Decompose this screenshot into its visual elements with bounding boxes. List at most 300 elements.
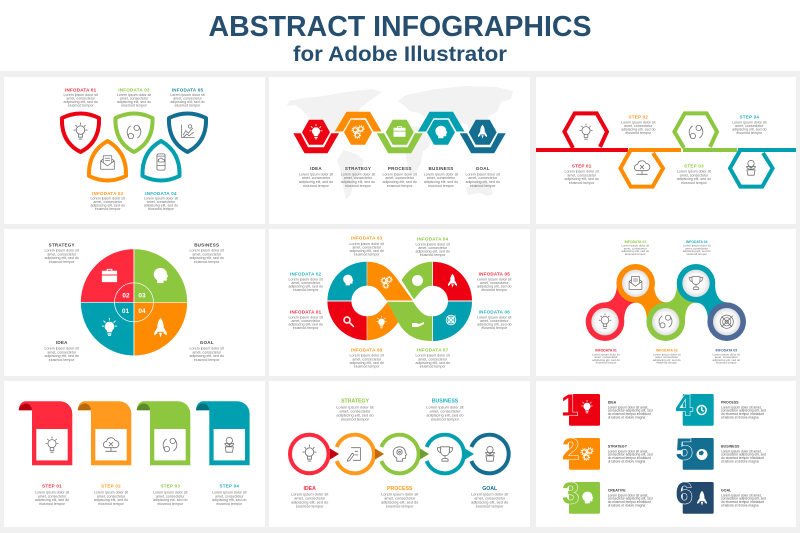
label business: adipiscing elit, sed do	[426, 412, 464, 418]
label infodata 04: amet, consectetur	[685, 246, 708, 250]
label step 01: adipiscing elit, sed do	[565, 177, 599, 181]
quadrant numbers: 04	[138, 308, 146, 315]
label step 04: STEP 04	[739, 114, 759, 119]
block 4 process: 4	[676, 388, 694, 422]
panel: numbered squares	[536, 381, 796, 527]
label step 01: Lorem ipsum dolor sit	[565, 170, 599, 174]
text idea: ut labore et dolore magna	[608, 415, 645, 419]
text goal: do eiusmod tempor incididunt	[721, 500, 764, 504]
label 05: eiusmod tempor	[175, 104, 201, 108]
label goal	[190, 340, 224, 362]
panel: world map hexagons	[269, 77, 530, 224]
label business: adipiscing elit, sed do	[424, 180, 458, 184]
label idea: Lorem ipsum dolor sit	[299, 172, 333, 176]
label infodata 04: adipiscing elit, sed do	[683, 249, 711, 253]
label 02: amet, consectetur	[93, 200, 123, 204]
text business: BUSINESS	[721, 444, 740, 448]
label process: eiusmod tempor	[387, 184, 413, 188]
text idea: do eiusmod tempor incididunt	[608, 412, 651, 416]
label infodata 08: adipiscing elit, sed do	[350, 361, 384, 365]
hexagon step 3	[674, 113, 717, 148]
block 2 strategy	[562, 432, 600, 470]
label step 04: adipiscing elit, sed do	[732, 128, 766, 132]
label process	[381, 486, 419, 508]
label infodata 08	[350, 348, 384, 368]
label 02: adipiscing elit, sed do	[91, 204, 125, 208]
panel: hexagon timeline	[536, 77, 796, 224]
label idea: adipiscing elit, sed do	[45, 354, 79, 358]
label strategy: Lorem ipsum dolor sit	[341, 172, 375, 176]
label infodata 02: adipiscing elit, sed do	[621, 249, 650, 253]
label infodata 06: amet, consectetur	[480, 319, 509, 323]
label step 02	[621, 114, 655, 135]
label step 04: STEP 04	[219, 484, 239, 488]
label process: eiusmod tempor	[386, 504, 414, 508]
label goal: adipiscing elit, sed do	[466, 180, 500, 184]
label infodata 02: Lorem ipsum dolor sit	[289, 278, 323, 282]
label business: amet, consectetur	[430, 408, 461, 414]
label infodata 03: eiusmod tempor	[656, 361, 677, 365]
text process: do eiusmod tempor incididunt	[721, 412, 764, 416]
label infodata 01: Lorem ipsum dolor sit	[592, 352, 620, 356]
text creative: consectetur adipiscing elit, sed	[608, 497, 653, 501]
label infodata 04: INFODATA 04	[686, 240, 708, 244]
label infodata 03: amet, consectetur	[352, 246, 382, 250]
label idea	[45, 340, 79, 362]
panel: five shields	[4, 77, 265, 224]
label step 01: amet, consectetur	[567, 173, 597, 177]
label infodata 05: eiusmod tempor	[716, 361, 737, 365]
label strategy	[341, 166, 375, 188]
label 04: adipiscing elit, sed do	[144, 204, 178, 208]
label 04: eiusmod tempor	[148, 207, 175, 211]
label 03: INFODATA 03	[118, 87, 150, 92]
label infodata 03: adipiscing elit, sed do	[350, 249, 384, 253]
ring strategy	[337, 435, 374, 473]
label 04: Lorem ipsum dolor sit	[144, 197, 178, 201]
label goal	[466, 166, 500, 188]
text strategy: ut labore et dolore magna	[608, 459, 645, 463]
text business: consectetur adipiscing elit, sed	[721, 453, 766, 457]
label business: BUSINESS	[194, 243, 219, 248]
node 03	[646, 302, 685, 341]
label process	[383, 166, 417, 188]
label infodata 04	[683, 240, 711, 256]
ribbon step 04	[196, 401, 250, 465]
label infodata 03: Lorem ipsum dolor sit	[653, 352, 681, 356]
text goal: GOAL	[721, 488, 732, 492]
label strategy: eiusmod tempor	[345, 184, 372, 188]
label step 03: STEP 03	[160, 484, 180, 488]
label step 02: Lorem ipsum dolor sit	[621, 120, 655, 124]
label infodata 06	[477, 309, 511, 330]
label step 04	[732, 114, 766, 135]
label infodata 05: amet, consectetur	[715, 355, 738, 359]
label infodata 01: amet, consectetur	[291, 319, 321, 323]
label 02: Lorem ipsum dolor sit	[91, 197, 125, 201]
panel: ring chain	[269, 381, 530, 527]
label idea: eiusmod tempor	[296, 504, 324, 508]
label 01	[64, 87, 98, 108]
label step 03: adipiscing elit, sed do	[677, 177, 711, 181]
label 04: amet, consectetur	[147, 200, 176, 204]
label step 01: STEP 01	[42, 484, 62, 488]
label infodata 05: Lorem ipsum dolor sit	[477, 278, 511, 282]
label strategy: amet, consectetur	[340, 408, 371, 414]
label infodata 07: amet, consectetur	[418, 357, 448, 361]
quadrant icons	[102, 268, 168, 337]
label infodata 07: adipiscing elit, sed do	[416, 361, 450, 365]
label infodata 06: INFODATA 06	[479, 309, 510, 314]
label infodata 04: adipiscing elit, sed do	[416, 250, 450, 254]
label 05: Lorem ipsum dolor sit	[170, 93, 205, 97]
text idea: IDEA	[608, 400, 617, 404]
label infodata 07: INFODATA 07	[417, 348, 449, 353]
label infodata 04: eiusmod tempor	[420, 253, 446, 257]
label infodata 04: Lorem ipsum dolor sit	[683, 244, 711, 248]
label infodata 02	[621, 240, 650, 256]
text process: PROCESS	[721, 400, 739, 404]
panel: ribbons	[4, 381, 265, 527]
label idea	[291, 486, 329, 508]
quadrant numbers: 03	[138, 293, 146, 300]
label infodata 06: eiusmod tempor	[481, 326, 508, 330]
text strategy	[608, 444, 653, 463]
label goal: eiusmod tempor	[470, 184, 496, 188]
label step 03: amet, consectetur	[680, 173, 709, 177]
label strategy: Lorem ipsum dolor sit	[45, 249, 79, 253]
label goal	[471, 486, 509, 508]
world map	[287, 86, 513, 200]
label step 01	[35, 484, 69, 506]
text goal: ut labore et dolore magna	[721, 503, 759, 507]
label 01: Lorem ipsum dolor sit	[64, 93, 98, 97]
label step 04: adipiscing elit, sed do	[212, 498, 246, 502]
label step 03: Lorem ipsum dolor sit	[153, 490, 187, 494]
shield 04	[142, 141, 180, 180]
hexagon step 1	[564, 113, 607, 148]
label infodata 01: eiusmod tempor	[293, 326, 319, 330]
label 04: INFODATA 04	[145, 191, 177, 196]
label 01: INFODATA 01	[65, 87, 97, 92]
text business: Lorem ipsum dolor sit amet,	[721, 449, 762, 453]
ribbon step 01	[19, 401, 72, 465]
label infodata 08: Lorem ipsum dolor sit	[350, 354, 384, 358]
label 03: Lorem ipsum dolor sit	[117, 93, 151, 97]
label infodata 07: eiusmod tempor	[420, 364, 446, 368]
label goal: GOAL	[200, 340, 214, 345]
label goal: adipiscing elit, sed do	[190, 354, 224, 358]
label infodata 05	[477, 271, 511, 292]
panel: pie quadrants	[4, 229, 265, 376]
label idea: amet, consectetur	[294, 496, 326, 500]
label step 01: adipiscing elit, sed do	[35, 498, 69, 502]
label 05: amet, consectetur	[173, 97, 203, 101]
text idea: Lorem ipsum dolor sit amet,	[608, 405, 648, 409]
label infodata 01: INFODATA 01	[595, 349, 617, 353]
label infodata 04: Lorem ipsum dolor sit	[416, 243, 450, 247]
label infodata 05: amet, consectetur	[480, 281, 509, 285]
label infodata 01	[289, 309, 323, 330]
infinity segments	[327, 262, 472, 341]
label business: eiusmod tempor	[428, 184, 455, 188]
label infodata 03	[653, 349, 681, 365]
label process: adipiscing elit, sed do	[381, 500, 418, 504]
block 5 business: 5	[676, 432, 693, 466]
label goal: GOAL	[476, 166, 490, 171]
text process: Lorem ipsum dolor sit amet,	[721, 405, 762, 409]
label process: PROCESS	[388, 166, 412, 171]
label step 02: STEP 02	[101, 484, 121, 488]
block 3 creative	[562, 476, 600, 514]
subtitle: for Adobe Illustrator	[293, 42, 508, 66]
label step 03: adipiscing elit, sed do	[153, 498, 187, 502]
label infodata 03: eiusmod tempor	[354, 252, 380, 256]
label business: BUSINESS	[428, 166, 454, 171]
text strategy: Lorem ipsum dolor sit amet,	[608, 449, 648, 453]
timeline line	[536, 148, 796, 152]
panel: infinity loop	[269, 229, 530, 376]
label step 04: amet, consectetur	[735, 124, 764, 128]
label 05: INFODATA 05	[172, 87, 203, 92]
pie chart	[80, 249, 188, 356]
block 2 strategy: 2	[562, 432, 579, 466]
label strategy: adipiscing elit, sed do	[45, 256, 79, 260]
label step 01: Lorem ipsum dolor sit	[35, 490, 69, 494]
label infodata 01: adipiscing elit, sed do	[289, 322, 323, 326]
shield 01	[62, 114, 99, 152]
arrow 1	[330, 448, 339, 460]
label step 01: STEP 01	[572, 163, 592, 168]
step 1 chevron and hexagon	[293, 120, 339, 153]
ribbon step 02	[78, 401, 131, 465]
label step 03: eiusmod tempor	[681, 181, 708, 185]
label infodata 06: Lorem ipsum dolor sit	[477, 315, 511, 319]
quadrant numbers: 01	[122, 308, 129, 315]
block 5 business	[676, 432, 714, 470]
label idea: adipiscing elit, sed do	[291, 500, 328, 504]
label infodata 01: INFODATA 01	[290, 309, 322, 314]
label infodata 08: INFODATA 08	[351, 348, 383, 353]
label process: amet, consectetur	[385, 176, 415, 180]
label step 03: Lorem ipsum dolor sit	[677, 170, 711, 174]
label goal: eiusmod tempor	[194, 358, 220, 362]
node 05	[707, 302, 746, 341]
infinity icons	[343, 274, 457, 328]
label infodata 04: eiusmod tempor	[686, 252, 707, 256]
block 1 idea: 1	[561, 388, 578, 422]
label process: Lorem ipsum dolor sit	[383, 172, 417, 176]
hexagon step 2	[620, 150, 663, 187]
quadrant numbers	[122, 293, 146, 315]
label 02: INFODATA 02	[92, 191, 124, 196]
label idea	[299, 166, 333, 188]
text creative: ut labore et dolore magna	[608, 503, 645, 507]
label 03	[117, 87, 151, 108]
block 1 idea	[561, 388, 600, 426]
label step 02: STEP 02	[628, 114, 648, 119]
label business: BUSINESS	[432, 398, 459, 404]
label infodata 05: adipiscing elit, sed do	[712, 358, 741, 362]
label business	[424, 166, 458, 188]
label strategy: adipiscing elit, sed do	[341, 180, 375, 184]
label infodata 01: amet, consectetur	[595, 355, 618, 359]
label goal: GOAL	[482, 486, 498, 492]
label step 04: Lorem ipsum dolor sit	[212, 490, 246, 494]
label infodata 06: adipiscing elit, sed do	[477, 322, 511, 326]
connector links	[605, 283, 727, 322]
panel: connected circles	[536, 229, 796, 376]
label infodata 02: eiusmod tempor	[293, 288, 319, 292]
text creative: Lorem ipsum dolor sit amet,	[608, 493, 648, 497]
label step 04: Lorem ipsum dolor sit	[732, 120, 766, 124]
label business: Lorem ipsum dolor sit	[426, 404, 465, 410]
label idea: Lorem ipsum dolor sit	[45, 346, 79, 350]
node 02	[616, 264, 655, 303]
label strategy: eiusmod tempor	[341, 416, 370, 422]
label infodata 01	[592, 349, 620, 365]
label step 02: amet, consectetur	[97, 494, 126, 498]
step 4 chevron and hexagon	[418, 112, 464, 145]
label infodata 07	[416, 348, 450, 368]
label business	[190, 243, 224, 264]
label business: Lorem ipsum dolor sit	[190, 249, 224, 253]
label step 02: adipiscing elit, sed do	[621, 128, 655, 132]
label idea: IDEA	[310, 166, 322, 171]
label process: adipiscing elit, sed do	[383, 180, 417, 184]
ring business	[427, 435, 464, 473]
label infodata 01: eiusmod tempor	[596, 361, 616, 365]
label goal: eiusmod tempor	[476, 504, 504, 508]
label strategy: STRATEGY	[345, 166, 371, 171]
label infodata 08: eiusmod tempor	[354, 364, 380, 368]
text creative	[608, 488, 653, 507]
text goal: Lorem ipsum dolor sit amet,	[721, 493, 762, 497]
text process: ut labore et dolore magna	[721, 415, 759, 419]
label step 01: amet, consectetur	[38, 494, 67, 498]
label step 02: adipiscing elit, sed do	[94, 498, 128, 502]
label infodata 02: adipiscing elit, sed do	[289, 284, 323, 288]
label infodata 02: amet, consectetur	[291, 281, 321, 285]
label infodata 02: INFODATA 02	[624, 240, 646, 244]
text idea	[608, 400, 653, 419]
label goal: Lorem ipsum dolor sit	[471, 492, 509, 496]
arrow 2	[375, 448, 384, 460]
ring goal	[471, 435, 509, 473]
label process: PROCESS	[387, 486, 413, 492]
label infodata 04: amet, consectetur	[418, 246, 448, 250]
ring process	[381, 435, 419, 473]
label goal: adipiscing elit, sed do	[471, 500, 508, 504]
label step 03: amet, consectetur	[156, 494, 185, 498]
step 2 chevron and hexagon	[335, 112, 382, 145]
title: ABSTRACT INFOGRAPHICS	[208, 11, 592, 43]
label strategy: STRATEGY	[49, 243, 75, 248]
label infodata 01: Lorem ipsum dolor sit	[289, 315, 323, 319]
text strategy: consectetur adipiscing elit, sed	[608, 453, 653, 457]
label infodata 03: Lorem ipsum dolor sit	[350, 242, 384, 246]
label business: eiusmod tempor	[194, 260, 220, 264]
label business: amet, consectetur	[192, 252, 222, 256]
label strategy: Lorem ipsum dolor sit	[336, 404, 375, 410]
text process	[721, 400, 766, 419]
label infodata 03: INFODATA 03	[351, 236, 383, 240]
label infodata 02	[289, 271, 323, 292]
label idea: IDEA	[303, 486, 316, 492]
text strategy: do eiusmod tempor incididunt	[608, 456, 651, 460]
label 01: eiusmod tempor	[68, 104, 94, 108]
label step 02: eiusmod tempor	[98, 502, 125, 506]
text strategy: STRATEGY	[608, 444, 628, 448]
node 04	[677, 264, 715, 303]
label strategy: amet, consectetur	[344, 176, 373, 180]
label infodata 05: adipiscing elit, sed do	[477, 284, 511, 288]
label business: Lorem ipsum dolor sit	[424, 172, 458, 176]
label idea: adipiscing elit, sed do	[299, 180, 333, 184]
text process: consectetur adipiscing elit, sed	[721, 409, 766, 413]
ring idea	[290, 435, 329, 473]
label strategy: amet, consectetur	[47, 252, 77, 256]
label infodata 03	[350, 236, 384, 256]
block 3 creative: 3	[562, 476, 579, 510]
block 6 goal	[676, 476, 714, 514]
hexagon step 4	[730, 150, 773, 187]
label infodata 08: amet, consectetur	[352, 357, 382, 361]
label step 01: eiusmod tempor	[569, 181, 595, 185]
label strategy	[45, 243, 79, 264]
label 03: adipiscing elit, sed do	[117, 100, 151, 104]
label goal: amet, consectetur	[474, 496, 506, 500]
label step 02	[94, 484, 128, 506]
label step 04: eiusmod tempor	[736, 131, 763, 135]
label infodata 03: amet, consectetur	[655, 355, 678, 359]
text business: do eiusmod tempor incididunt	[721, 456, 764, 460]
label business	[426, 398, 465, 422]
block 4 process	[676, 388, 714, 426]
node 01	[586, 302, 624, 341]
label goal: amet, consectetur	[468, 176, 498, 180]
text goal: consectetur adipiscing elit, sed	[721, 497, 766, 501]
label step 04: eiusmod tempor	[216, 502, 243, 506]
label process: amet, consectetur	[384, 496, 416, 500]
label step 02: Lorem ipsum dolor sit	[94, 490, 128, 494]
label strategy: eiusmod tempor	[49, 260, 75, 264]
step 5 chevron and hexagon	[460, 120, 506, 153]
label process: Lorem ipsum dolor sit	[381, 492, 419, 496]
label 01: amet, consectetur	[66, 97, 96, 101]
label 04	[144, 191, 178, 211]
label infodata 05: Lorem ipsum dolor sit	[712, 352, 740, 356]
label step 02: eiusmod tempor	[625, 131, 652, 135]
label step 03: STEP 03	[684, 163, 704, 168]
label goal: amet, consectetur	[192, 350, 222, 354]
label infodata 02: Lorem ipsum dolor sit	[621, 244, 649, 248]
label 01: adipiscing elit, sed do	[64, 100, 98, 104]
text idea: consectetur adipiscing elit, sed	[608, 409, 653, 413]
label step 01	[565, 163, 599, 185]
label infodata 04: INFODATA 04	[417, 236, 449, 241]
label business: amet, consectetur	[427, 176, 456, 180]
label infodata 03: INFODATA 03	[656, 349, 678, 353]
label 03: amet, consectetur	[120, 97, 149, 101]
label goal: Lorem ipsum dolor sit	[190, 346, 224, 350]
label infodata 07: Lorem ipsum dolor sit	[416, 354, 450, 358]
label 05	[170, 87, 205, 108]
label 02	[91, 191, 125, 211]
step 3 chevron and hexagon	[377, 120, 423, 153]
label infodata 05: eiusmod tempor	[481, 288, 508, 292]
text creative: CREATIVE	[608, 488, 626, 492]
